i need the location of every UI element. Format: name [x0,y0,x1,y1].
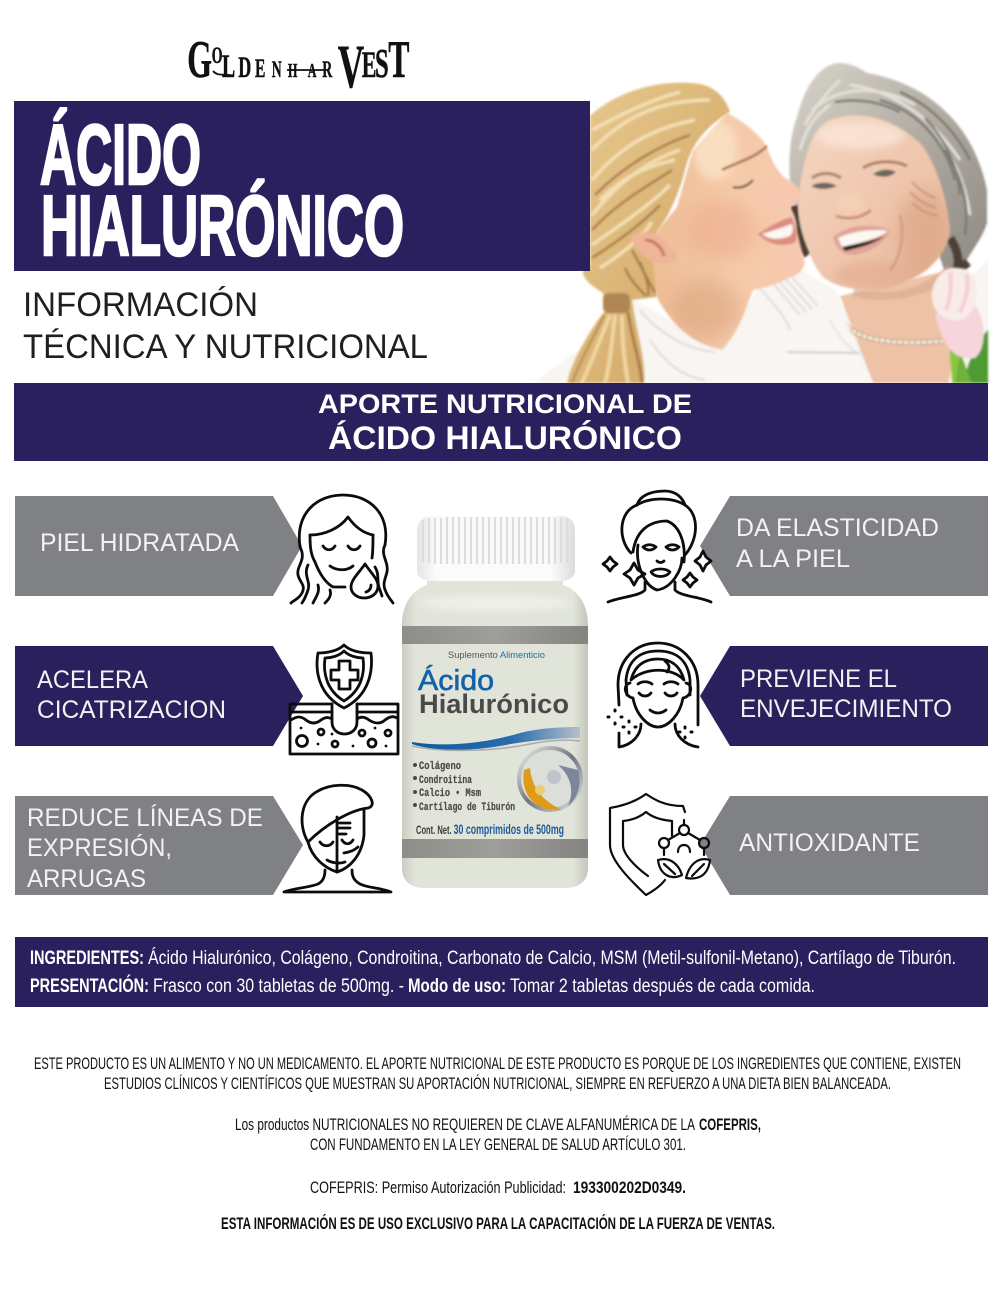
icon: radiant face with towel [603,491,711,602]
logo: Golden Harvest: H [288,59,297,82]
arrow: da elasticidad: A LA PIEL [736,545,850,573]
elderly woman's hair [789,63,987,272]
icon: shield with molecule and leaves [610,794,710,895]
permit line: 193300202D0349. [573,1178,686,1197]
young woman's face [630,113,805,350]
title banner [14,101,590,274]
ingredients panel [15,937,988,1007]
arrow: previene envejecimiento [700,646,988,746]
arrow: reduce líneas: ARRUGAS [27,865,146,893]
arrow: previene envejecimiento: ENVEJECIMIENTO [740,695,952,723]
arrow: da elasticidad [700,496,988,596]
bottle cap [417,516,575,581]
subtitle: INFORMACIÓN [23,286,258,324]
elderly woman's face [798,115,953,291]
elderly woman's white blouse [703,298,873,383]
regulatory note: Los productos NUTRICIONALES NO REQUIEREN DE CLAVE ALFANUMÉRICA DE LA [235,1115,695,1134]
presentation line: Frasco con 30 tabletas de 500mg. - [153,976,404,997]
arrow: da elasticidad: DA ELASTICIDAD [736,514,939,542]
arrow: antioxidante [700,796,988,895]
section banner: ÁCIDO HIALURÓNICO [328,420,682,456]
section banner [14,383,988,461]
young woman's hair [567,83,730,383]
tulips [932,268,988,383]
arrow: piel hidratada: PIEL HIDRATADA [40,529,239,557]
label net content: Cont. Net. 30 comprimidos de 500mg [416,821,564,837]
product bottle [402,516,588,888]
regulatory note: COFEPRIS, [699,1115,761,1134]
arrow: antioxidante: ANTIOXIDANTE [739,829,920,857]
section banner: APORTE NUTRICIONAL DE [318,389,692,419]
label header text: Suplemento Alimenticio [448,650,545,660]
logo: Golden Harvest: D [238,52,251,84]
label bands [402,626,588,644]
logo: Golden Harvest [187,31,409,100]
product name on label [418,664,569,719]
logo: Golden Harvest: A [308,59,317,82]
label ingredient list: Calcio • Msm [419,788,481,800]
label ingredient list [413,761,515,814]
disclaimer text [34,1054,961,1093]
logo: Golden Harvest: O [212,44,223,69]
arrow: reduce líneas [15,796,303,895]
logo: Golden Harvest: T [388,31,409,89]
icon: hydrated face with drop [291,495,393,603]
title line: Ácido: ÁCIDO [40,108,201,203]
regulatory note: CON FUNDAMENTO EN LA LEY GENERAL DE SALUD ARTÍCULO 301. [310,1135,686,1154]
presentation line: PRESENTACIÓN: [30,975,149,997]
logo: Golden Harvest: V [338,32,364,100]
arrow: reduce líneas: REDUCE LÍNEAS DE [27,803,263,832]
icon: half-lined face with towel [284,785,391,892]
logo: Golden Harvest: S [375,42,389,87]
young woman's white blouse [535,270,880,383]
arrow: previene envejecimiento: PREVIENE EL [740,665,897,693]
logo: Golden Harvest: E [255,54,265,83]
bottle neck and body [402,578,588,888]
arrow: acelera cicatrización: ACELERA [37,666,148,694]
logo: Golden Harvest: E [362,44,377,85]
subtitle [23,286,428,366]
subtitle: TÉCNICA Y NUTRICIONAL [23,328,428,366]
label emblem [519,748,581,810]
product name on label: Ácido [418,664,494,697]
photo: young woman and elderly woman [535,63,988,383]
logo: Golden Harvest: R [322,58,332,83]
arrow: reduce líneas: EXPRESIÓN, [27,833,172,862]
presentation line: Modo de uso: [408,976,506,997]
presentation line: Tomar 2 tabletas después de cada comida. [510,976,815,997]
presentation line [30,975,815,997]
arrow: piel hidratada [15,496,302,596]
label ingredient list: Condroitina [419,775,472,787]
icon: shield over healing skin [290,645,398,754]
logo: Golden Harvest: G [187,31,212,89]
logo: Golden Harvest: N [272,58,282,83]
label ingredient list: Colágeno [419,761,461,773]
label ingredient list: Cartílago de Tiburón [419,802,515,814]
icon: face with headband [608,643,698,747]
arrow: acelera cicatrización [15,646,303,746]
blue wave [412,727,580,750]
arrow: acelera cicatrización: CICATRIZACION [37,696,226,724]
elderly woman's blouse right side [945,260,988,383]
permit line: COFEPRIS: Permiso Autorización Publicidad: [310,1178,566,1197]
ingredients line: INGREDIENTES: [30,948,144,969]
title line: Hialurónico: HIALURÓNICO [41,179,404,274]
elderly woman's chest and necklace [840,265,960,383]
logo: Golden Harvest: L [222,48,235,84]
regulatory note [235,1115,761,1154]
product name on label: Hialurónico [419,689,569,719]
